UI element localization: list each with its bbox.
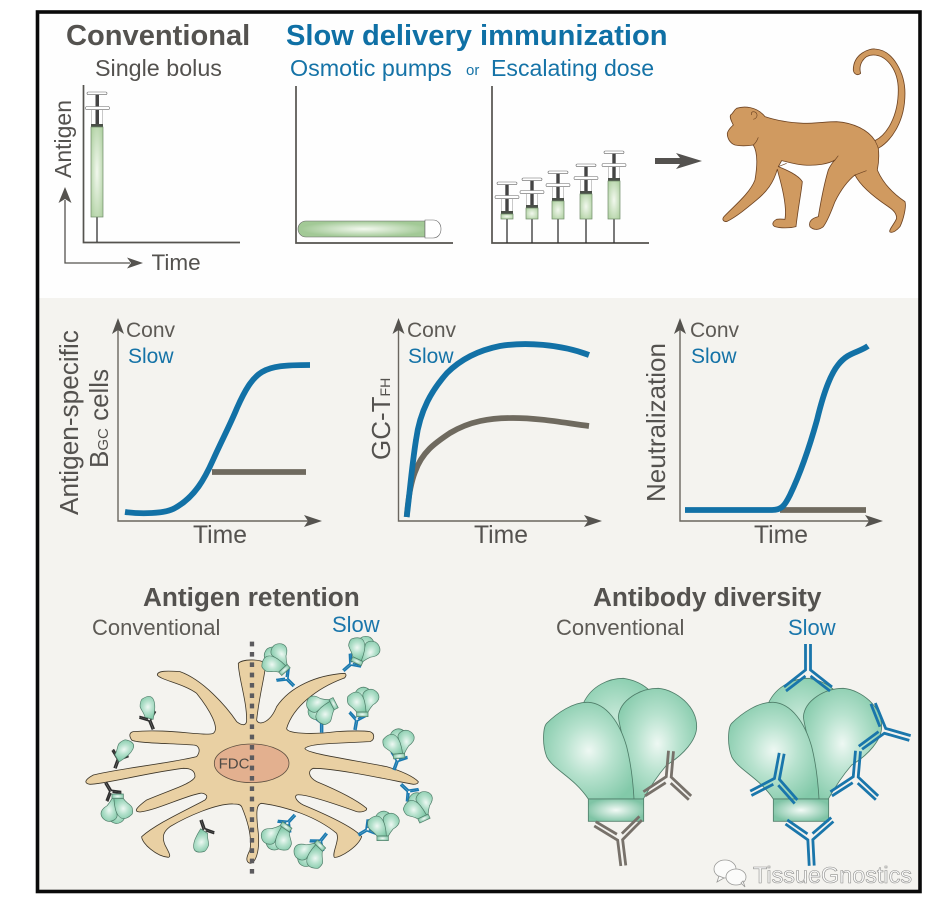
chart: neutralization: Neutralization [641, 343, 671, 502]
label: Conventional (retention): Conventional [92, 615, 220, 640]
label: Slow (retention): Slow [332, 612, 380, 637]
FDC label: FDC [219, 756, 250, 773]
FDC body [86, 660, 418, 863]
slow antibodies [276, 653, 420, 852]
chart: antigen-specific BGC cells: Conv [126, 319, 176, 342]
chart: GC-TFH: Slow [408, 345, 454, 368]
syringe 5 [602, 151, 626, 243]
watermark: WeChat icon [714, 860, 746, 887]
heading: Antibody diversity: Antibody diversity [593, 582, 822, 612]
slow antigen trimers [255, 630, 440, 875]
osmotic pump capsule [298, 220, 441, 238]
watermark: TissueGnostics: TissueGnostics [753, 862, 912, 888]
chart: antigen-specific BGC cells: Slow [128, 345, 174, 368]
subtitle: Single bolus: Single bolus [95, 55, 222, 81]
heading: Antigen retention: Antigen retention [143, 582, 360, 612]
conventional antibodies with antigens [98, 710, 215, 839]
diagram: slow trimer with antibodies [729, 644, 917, 867]
chart: GC-TFH [366, 318, 602, 549]
label: Conventional (diversity): Conventional [556, 615, 684, 640]
icon: monkey [723, 49, 905, 232]
syringe 3 [546, 171, 570, 243]
syringe 1 [495, 182, 519, 243]
chart: antigen-specific BGC cells: Time [193, 522, 247, 549]
chart: single bolus syringe [84, 85, 240, 242]
chart: antigen-specific BGC cells: BGC cells [84, 369, 114, 468]
chart: neutralization: Time [754, 522, 808, 549]
chart: GC-TFH: Time [474, 522, 528, 549]
chart: GC-TFH: GC-TFH [366, 378, 396, 460]
label: Slow (diversity): Slow [788, 615, 836, 640]
chart: neutralization: Slow [691, 345, 737, 368]
axis key: Antigen vs Time [50, 100, 201, 275]
diagram: follicular dendritic cell [86, 630, 440, 878]
subtitle: Escalating dose: Escalating dose [491, 55, 654, 81]
chart: neutralization: Conv [690, 319, 740, 342]
chart: neutralization [641, 318, 883, 549]
syringe 4 [574, 164, 598, 243]
arrow to monkey [655, 153, 702, 169]
diagram: conventional trimer with antibodies [544, 678, 697, 869]
axis key: Antigen vs Time: Time [152, 250, 201, 275]
chart: antigen-specific BGC cells: Antigen-specific [54, 330, 84, 515]
syringe 2 [520, 178, 544, 243]
conventional antigen monomers and trimer [101, 695, 214, 856]
title: Conventional: Conventional [66, 20, 250, 52]
axis key: Antigen vs Time: Antigen [50, 100, 76, 178]
syringe [86, 92, 110, 242]
subtitle: Osmotic pumps: Osmotic pumps [290, 55, 452, 81]
chart: osmotic pump [296, 86, 453, 243]
chart: GC-TFH: Conv [407, 319, 457, 342]
subtitle: or: or [466, 62, 479, 79]
FDC nucleus [214, 744, 289, 783]
divider: dashed line [245, 642, 258, 878]
chart: escalating dose syringes [492, 86, 649, 243]
chart: antigen-specific BGC cells [54, 318, 322, 549]
title: Slow delivery immunization: Slow delivery immunization [286, 20, 668, 52]
